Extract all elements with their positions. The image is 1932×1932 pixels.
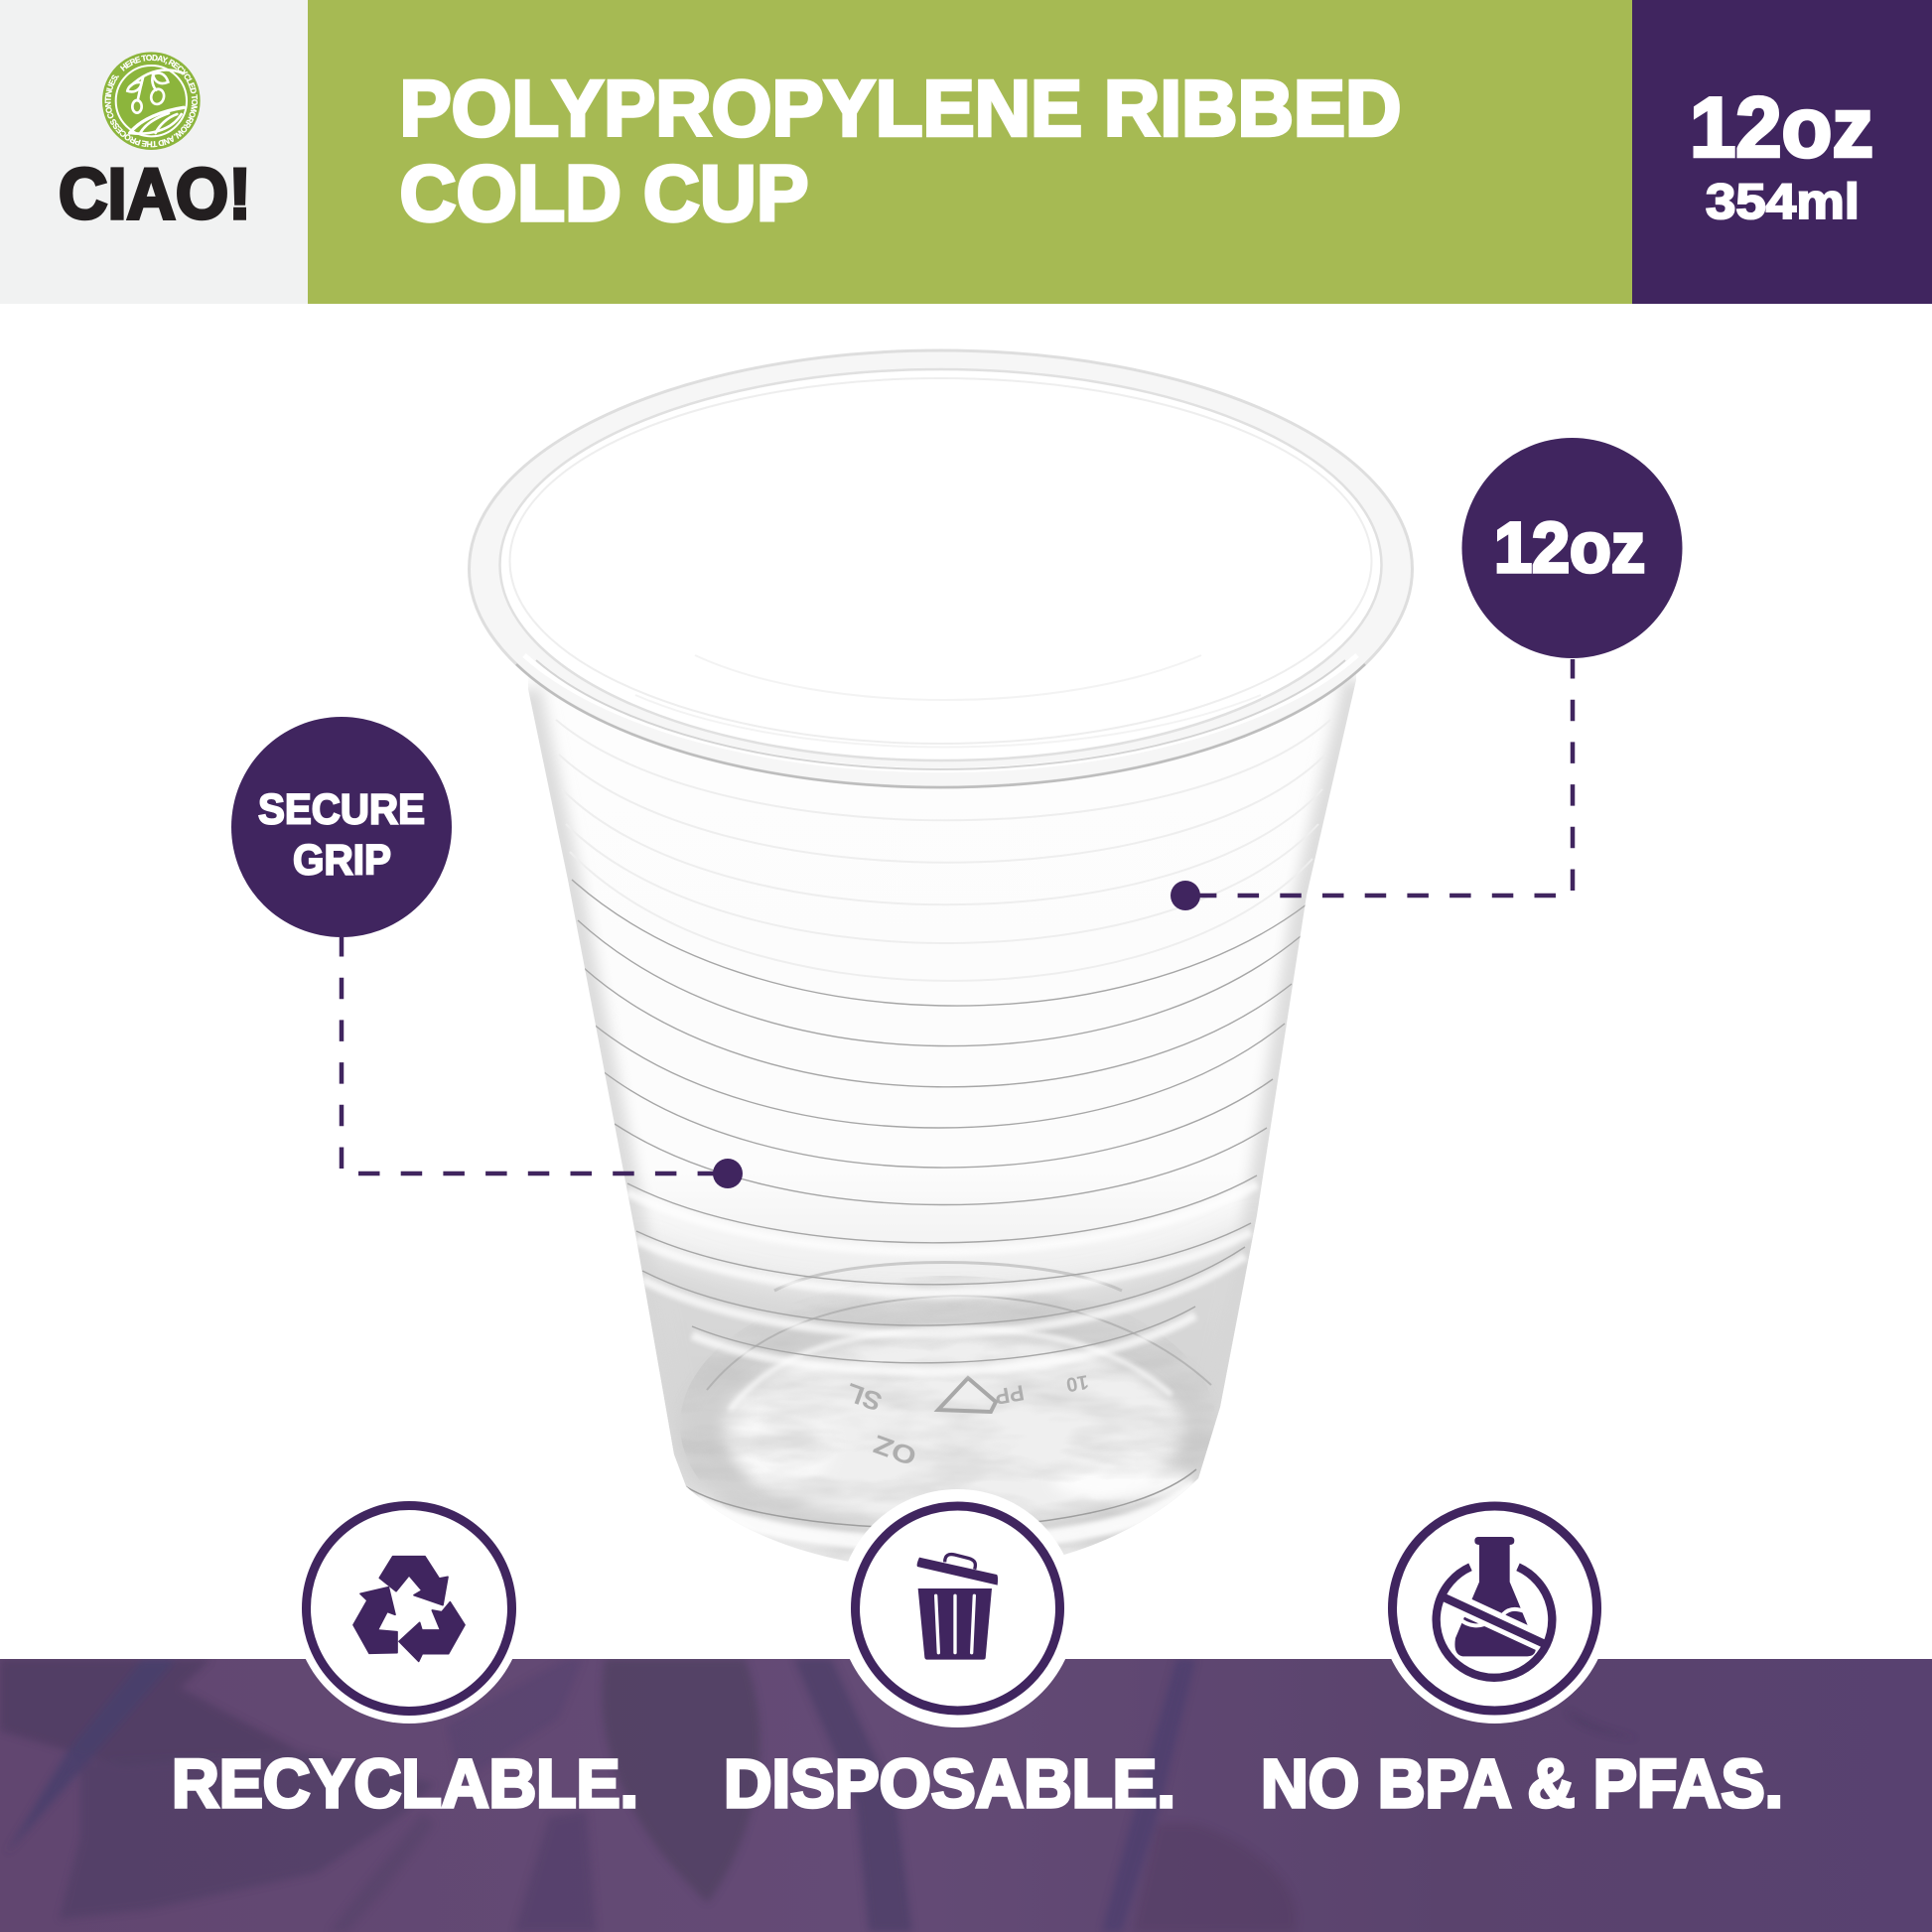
callout label <box>258 786 425 884</box>
callout label: GRIP <box>293 836 391 884</box>
badge: recyclable <box>294 1493 524 1724</box>
callout label: 12oz <box>1494 509 1645 588</box>
leader dot <box>1171 881 1200 910</box>
soft edge shading <box>528 680 1356 1478</box>
embossed base marks: 10 <box>1064 1370 1090 1396</box>
embossed base marks: PP <box>993 1380 1026 1410</box>
icon: trash can <box>917 1555 998 1660</box>
embossed base marks: SL <box>842 1377 886 1418</box>
logo wordmark: CIAO! <box>59 155 251 234</box>
callout circle <box>231 717 452 937</box>
title: COLD CUP <box>399 149 808 237</box>
icon: crossed-out flask <box>1437 1537 1552 1678</box>
cup rim <box>469 350 1412 787</box>
leader dot <box>713 1159 743 1188</box>
title: POLYPROPYLENE RIBBED <box>399 64 1402 153</box>
badge: disposable <box>838 1489 1076 1727</box>
callout circle <box>1461 438 1682 658</box>
size in millilitres: 354ml <box>1706 174 1860 229</box>
leaf shadows <box>0 1659 1242 1932</box>
callout: 12oz <box>1171 438 1682 910</box>
embossed base marks: OZ <box>869 1429 920 1472</box>
product: clear ribbed cup <box>469 350 1412 1579</box>
cup base shading <box>649 1230 1244 1559</box>
cup body <box>528 635 1356 1571</box>
callout: secure grip <box>231 717 743 1188</box>
panel: logo <box>0 0 308 304</box>
benefit labels <box>172 1745 1783 1822</box>
size in ounces: 12oz <box>1690 81 1873 175</box>
footer band <box>0 1659 1932 1932</box>
header bar <box>0 0 1932 304</box>
leader line <box>342 937 728 1173</box>
icon: recycled olive badge: HERE TODAY, RECYCLED TOMORROW. AND THE PROCESS CONTINUES. <box>105 55 199 147</box>
grip ribs <box>572 880 1307 1372</box>
label: disposable: DISPOSABLE. <box>724 1745 1175 1822</box>
badge: no BPA and PFAS <box>1380 1493 1610 1724</box>
panel: size <box>1632 0 1932 304</box>
label: no BPA and PFAS: NO BPA & PFAS. <box>1261 1745 1783 1822</box>
faint upper ribs <box>556 719 1327 982</box>
embossed base marks <box>850 1375 1088 1463</box>
panel: title band <box>308 0 1632 304</box>
icon: recycling arrows <box>353 1557 465 1661</box>
title <box>399 64 1402 237</box>
callout label: SECURE <box>258 786 425 834</box>
label: recyclable: RECYCLABLE. <box>172 1745 638 1822</box>
leader line <box>1185 659 1573 896</box>
